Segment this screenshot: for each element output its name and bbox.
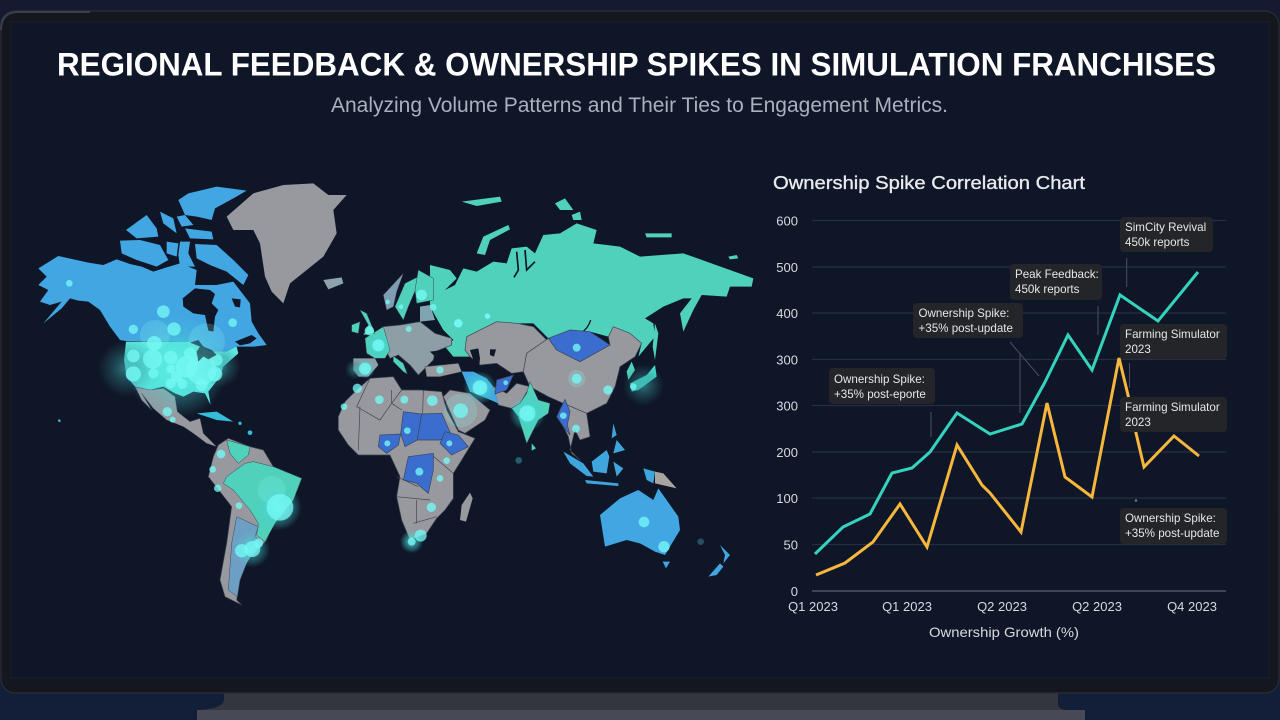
- turkey: [425, 363, 462, 377]
- x axis labels: Q2 2023: [1072, 599, 1122, 614]
- andean and southern countries: [208, 438, 302, 605]
- papua new guinea: [655, 472, 677, 488]
- madagascar: [460, 493, 473, 522]
- dr congo: [403, 453, 433, 493]
- canada and alaska: [38, 256, 267, 353]
- brazil: [223, 462, 302, 542]
- x axis labels: Q1 2023: [882, 599, 932, 614]
- pakistan: [493, 383, 530, 408]
- arctic archipelagos: [462, 197, 738, 259]
- y axis grid and labels: 0: [791, 584, 798, 599]
- y axis grid and labels: [776, 214, 1226, 599]
- hokkaido and korea: [627, 323, 658, 380]
- callout: farming simulator lower: [1120, 397, 1227, 432]
- callout: ownership spike left: +35% post-eporte: [834, 388, 926, 401]
- y axis grid and labels: 400: [776, 306, 798, 321]
- asia and africa data dots: [375, 314, 704, 553]
- sri lanka: [532, 443, 536, 451]
- argentina: [228, 517, 260, 597]
- japan: [630, 365, 657, 392]
- y axis grid and labels: 200: [776, 445, 798, 460]
- north america region: [38, 183, 347, 447]
- callout: peak feedback: Peak Feedback:: [1015, 268, 1099, 281]
- nigeria: [378, 434, 401, 453]
- x axis labels: [788, 599, 1217, 614]
- tasmania: [663, 562, 670, 568]
- norway: [383, 273, 403, 310]
- monitor stand: [197, 690, 1085, 720]
- africa: [338, 377, 475, 540]
- x axis labels: Q4 2023: [1167, 599, 1217, 614]
- mongolia: [548, 330, 610, 362]
- great lakes: [190, 340, 217, 362]
- y axis grid and labels: 100: [776, 491, 798, 506]
- venezuela and guyana: [227, 440, 250, 463]
- sudan: [417, 413, 451, 440]
- callout: ownership spike upper: Ownership Spike:: [918, 307, 1009, 320]
- india: [512, 382, 550, 443]
- callout: ownership spike lower: +35% post-update: [1125, 527, 1219, 540]
- mexico and central america: [135, 387, 217, 447]
- south america glows: [209, 450, 302, 568]
- callout: farming simulator upper: Farming Simulator: [1125, 328, 1220, 341]
- italy: [393, 356, 407, 374]
- callout: peak feedback: [1010, 264, 1102, 300]
- new zealand: [708, 545, 730, 577]
- callout: ownership spike lower: [1120, 508, 1227, 544]
- baltic states: [420, 305, 435, 322]
- title: REGIONAL FEEDBACK & OWNERSHIP SPIKES IN SIMULATION FRANCHISES: [57, 46, 1216, 82]
- russia: [430, 223, 753, 357]
- african borders: [357, 378, 453, 523]
- united states: [124, 342, 238, 405]
- iceland: [323, 277, 343, 289]
- x axis labels: Q2 2023: [977, 599, 1027, 614]
- hudson bay: [183, 288, 218, 332]
- callout: ownership spike left: [829, 368, 935, 404]
- x axis labels: Q1 2023: [788, 599, 838, 614]
- afghanistan: [495, 375, 513, 394]
- callout: farming simulator lower: Farming Simulator: [1125, 401, 1220, 414]
- y axis grid and labels: 300: [776, 398, 798, 414]
- novaya zemlya: [477, 225, 510, 255]
- central and eastern europe: [383, 322, 452, 375]
- chad: [401, 412, 422, 447]
- southeast asia: [558, 403, 590, 460]
- iberia: [353, 358, 378, 377]
- x axis title: Ownership Growth (%): [929, 624, 1079, 640]
- arctic islands: [120, 187, 248, 285]
- myanmar: [557, 399, 570, 435]
- iran: [462, 372, 498, 403]
- philippines and indonesia: [563, 423, 655, 486]
- black sea: [430, 350, 455, 362]
- callout: simcity revival: [1120, 217, 1213, 252]
- eurasia africa and oceania region: [338, 197, 753, 577]
- subtitle: Analyzing Volume Patterns and Their Ties to Engagement Metrics.: [331, 94, 948, 117]
- callout: farming simulator lower: 2023: [1125, 416, 1151, 429]
- callout: farming simulator upper: 2023: [1125, 343, 1151, 356]
- callout: ownership spike upper: [913, 303, 1023, 338]
- lake baikal: [581, 320, 591, 333]
- arabian peninsula: [443, 390, 490, 433]
- south america region: [208, 438, 302, 605]
- y axis grid and labels: 50: [784, 538, 798, 552]
- ethiopia: [440, 432, 468, 455]
- europe region: [341, 270, 490, 410]
- callout: simcity revival: 450k reports: [1125, 236, 1190, 249]
- y axis grid and labels: 600: [776, 214, 798, 228]
- europe data dots: [341, 290, 490, 410]
- callout: ownership spike left: Ownership Spike:: [834, 373, 925, 386]
- callout: ownership spike lower: Ownership Spike:: [1125, 512, 1216, 525]
- finland: [415, 270, 433, 303]
- australia: [600, 488, 680, 555]
- callout: simcity revival: SimCity Revival: [1125, 221, 1206, 234]
- united kingdom: [360, 310, 375, 335]
- y axis grid and labels: 300: [776, 352, 798, 368]
- callout: farming simulator upper: [1120, 324, 1227, 359]
- callout: ownership spike upper: +35% post-update: [918, 322, 1013, 335]
- sweden: [395, 277, 418, 320]
- cuba and caribbean islands: [58, 412, 252, 435]
- ireland: [352, 322, 360, 333]
- france: [365, 327, 390, 358]
- callout: peak feedback: 450k reports: [1015, 283, 1080, 296]
- kazakhstan and central asia: [465, 322, 547, 373]
- usa glow cluster: [66, 280, 241, 423]
- chart: ownership spike correlation: [773, 172, 1227, 640]
- greenland: [227, 183, 347, 303]
- y axis grid and labels: 500: [776, 260, 798, 275]
- chart heading: Ownership Spike Correlation Chart: [773, 172, 1085, 193]
- orange series line: [816, 358, 1199, 575]
- world map: [38, 183, 753, 605]
- gulf of st lawrence: [235, 335, 257, 345]
- caspian and aral seas: [470, 348, 496, 375]
- connector lines: [931, 258, 1137, 502]
- ungava bay: [232, 298, 241, 307]
- gulf of ob and yenisei inlet: [514, 250, 535, 277]
- china: [523, 327, 642, 413]
- teal series line: [815, 272, 1198, 554]
